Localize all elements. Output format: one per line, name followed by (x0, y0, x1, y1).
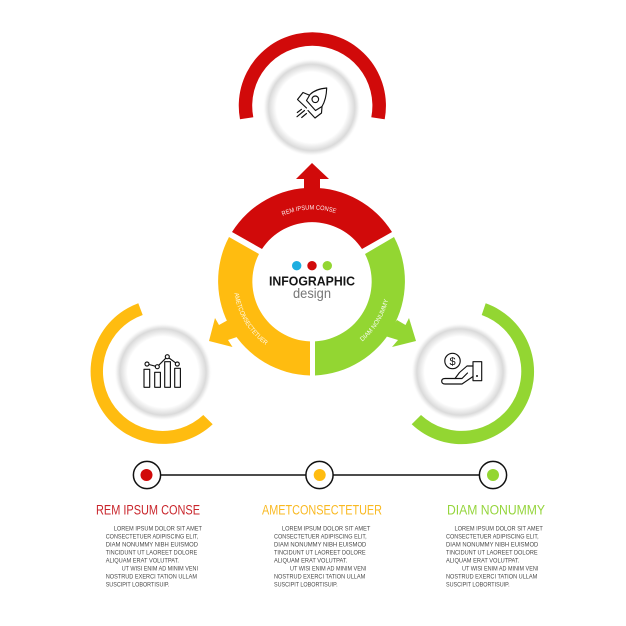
body: DIAM NONUMMY NIBH EUISMOD (446, 542, 538, 548)
timeline node: yellow (306, 461, 333, 489)
icon: hand with coin: $ (449, 356, 456, 368)
arrow: to yellow step (209, 318, 240, 347)
red segment (232, 188, 392, 249)
body: TINCIDUNT UT LAOREET DOLORE (446, 550, 538, 556)
timeline node: green (479, 461, 507, 489)
body (446, 526, 543, 588)
body: UT WISI ENIM AD MINIM VENI (290, 566, 366, 572)
ring label: yellow: AMETCONSECTETUER (234, 293, 268, 345)
arrow: to green step (385, 318, 416, 347)
panel: central ring (218, 188, 405, 376)
body: SUSCIPIT LOBORTISUIP. (446, 582, 510, 588)
heading: DIAM NONUMMY (447, 502, 545, 518)
body: SUSCIPIT LOBORTISUIP. (106, 582, 169, 588)
body: CONSECTETUER ADIPISCING ELIT, (446, 534, 539, 540)
body: UT WISI ENIM AD MINIM VENI (122, 566, 198, 572)
icon: hand with coin (442, 353, 482, 384)
arrow: up to red step (296, 163, 329, 192)
center logo (269, 261, 355, 301)
body: NOSTRUD EXERCI TATION ULLAM (446, 574, 538, 580)
icon: bar chart (144, 355, 180, 387)
body: TINCIDUNT UT LAOREET DOLORE (106, 550, 198, 556)
body: NOSTRUD EXERCI TATION ULLAM (106, 574, 197, 580)
white circle (114, 322, 212, 420)
timeline (133, 461, 507, 489)
body: LOREM IPSUM DOLOR SIT AMET (454, 526, 543, 532)
green arc (412, 303, 534, 444)
panel: left yellow step (91, 303, 213, 444)
text block: red column (96, 502, 202, 588)
body (274, 526, 370, 588)
timeline node: red (133, 461, 161, 489)
body: DIAM NONUMMY NIBH EUISMOD (274, 542, 366, 548)
center title: INFOGRAPHIC (269, 274, 355, 288)
body: SUSCIPIT LOBORTISUIP. (274, 582, 338, 588)
body: ALIQUAM ERAT VOLUTPAT. (446, 558, 519, 564)
center subtitle: design (293, 285, 331, 301)
body: ALIQUAM ERAT VOLUTPAT. (274, 558, 347, 564)
body: LOREM IPSUM DOLOR SIT AMET (114, 526, 202, 532)
body (106, 526, 202, 588)
panel: top red step (239, 32, 386, 156)
body: CONSECTETUER ADIPISCING ELIT, (106, 534, 198, 540)
red arc (239, 32, 386, 119)
body: UT WISI ENIM AD MINIM VENI (462, 566, 538, 572)
three dots (292, 261, 332, 270)
body: NOSTRUD EXERCI TATION ULLAM (274, 574, 366, 580)
text block: yellow column (262, 502, 382, 588)
icon: rocket (297, 88, 327, 118)
ring label: red: REM IPSUM CONSE (282, 205, 337, 216)
text block: green column (446, 502, 545, 588)
body: LOREM IPSUM DOLOR SIT AMET (282, 526, 370, 532)
green segment (315, 237, 405, 376)
body: TINCIDUNT UT LAOREET DOLORE (274, 550, 366, 556)
yellow segment (218, 237, 310, 376)
ring label: green: DIAM NONUMMY (360, 298, 388, 342)
yellow arc (91, 303, 213, 444)
body: CONSECTETUER ADIPISCING ELIT, (274, 534, 367, 540)
heading: REM IPSUM CONSE (96, 502, 200, 518)
body: ALIQUAM ERAT VOLUTPAT. (106, 558, 179, 564)
panel: right green step (411, 303, 534, 444)
white circle (411, 322, 509, 420)
heading: AMETCONSECTETUER (262, 502, 382, 518)
white circle (263, 58, 361, 156)
body: DIAM NONUMMY NIBH EUISMOD (106, 542, 198, 548)
